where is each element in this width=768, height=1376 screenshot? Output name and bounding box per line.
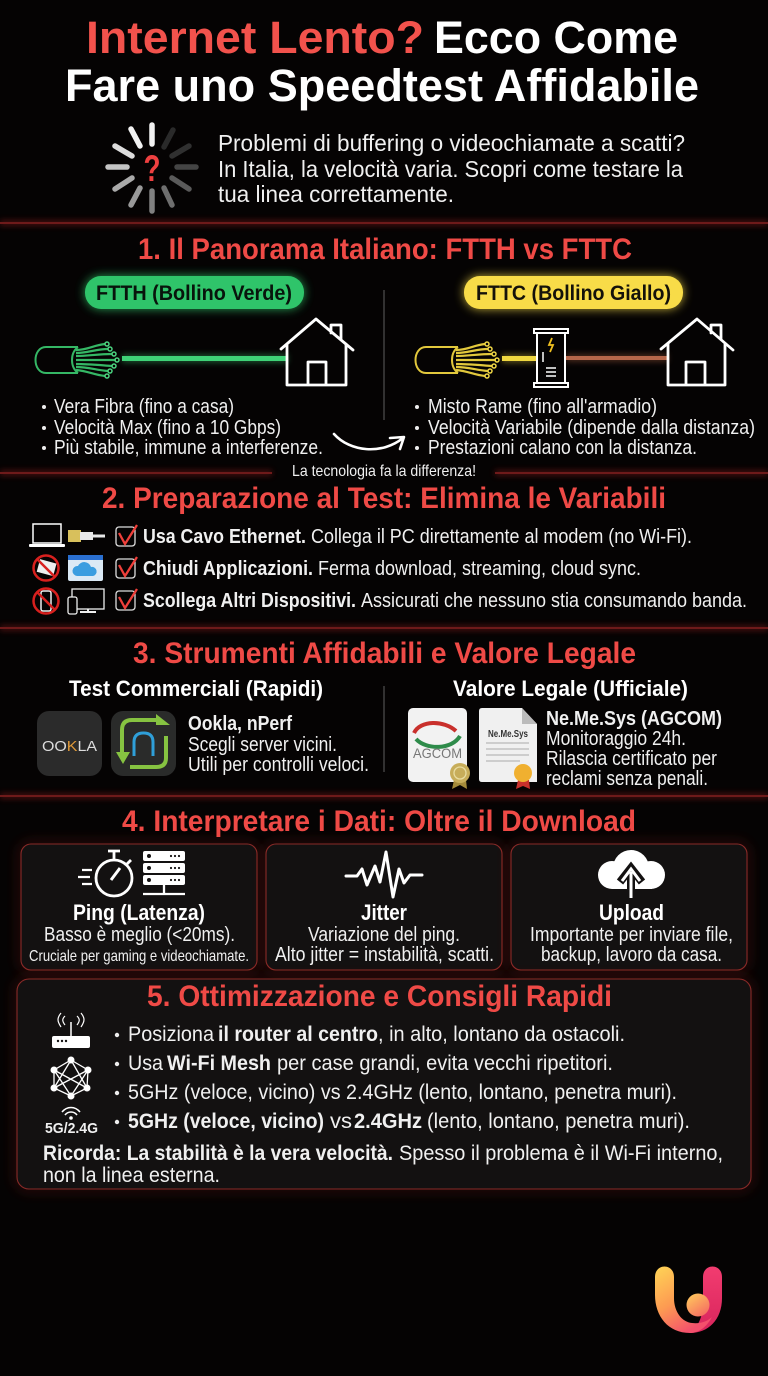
subheading: commercial tests: Test Commerciali (Rapidi) bbox=[69, 676, 323, 701]
tips list: 2.4GHz bbox=[354, 1109, 422, 1133]
tips list: Wi-Fi Mesh bbox=[167, 1051, 271, 1075]
panel: section 2 test preparation bbox=[29, 482, 747, 614]
tips list: 5GHz (veloce, vicino) bbox=[128, 1109, 324, 1133]
icon: buffering spinner with question mark bbox=[108, 125, 196, 211]
icon: laptop and ethernet plug bbox=[29, 524, 105, 547]
icon: wifi bands: 5G/2.4G bbox=[45, 1120, 98, 1137]
title: Fare uno Speedtest Affidabile bbox=[65, 60, 699, 111]
panel: section 1 FTTH vs FTTC bbox=[36, 233, 755, 459]
bullets: FTTC bbox=[415, 396, 755, 459]
badge: FTTH: FTTH (Bollino Verde) bbox=[96, 282, 292, 305]
title bbox=[65, 12, 699, 111]
checklist row: apps bbox=[116, 557, 641, 580]
reminder text: Spesso il problema è il Wi-Fi interno, bbox=[399, 1141, 723, 1165]
tips list: per case grandi, evita vecchi ripetitori. bbox=[277, 1051, 613, 1075]
logo bbox=[655, 1266, 722, 1333]
checklist row: apps: Chiudi Applicazioni. bbox=[143, 557, 313, 580]
text: Ne.Me.Sys: Ne.Me.Sys (AGCOM) bbox=[546, 707, 722, 730]
text: Ookla and nPerf bbox=[188, 712, 369, 776]
card: ping: Basso è meglio (<20ms). bbox=[44, 924, 235, 946]
checklist row: apps: Ferma download, streaming, cloud sync. bbox=[318, 557, 641, 580]
tips list: il router al centro bbox=[218, 1022, 378, 1046]
subheading: legal value: Valore Legale (Ufficiale) bbox=[453, 676, 688, 701]
icon: fibre, street cabinet, copper to house (FTTC) bbox=[416, 319, 733, 387]
card: upload: Upload bbox=[599, 900, 664, 925]
icon: Ookla app bbox=[37, 711, 102, 776]
tips list: Usa bbox=[128, 1051, 163, 1075]
icon: Ookla app: OOKLA bbox=[42, 738, 97, 755]
reminder text: Ricorda: La stabilità è la vera velocità. bbox=[43, 1141, 393, 1165]
tips list bbox=[115, 1022, 690, 1133]
intro text: tua linea correttamente. bbox=[218, 181, 454, 207]
arrow: FTTH to FTTC bbox=[334, 434, 404, 449]
icon: AGCOM certificate card bbox=[408, 708, 470, 789]
icon: cloud upload bbox=[598, 850, 665, 898]
badge: FTTC: FTTC (Bollino Giallo) bbox=[476, 282, 671, 305]
tips list: (lento, lontano, penetra muri). bbox=[427, 1109, 690, 1133]
icon: Ne.Me.Sys certificate document: Ne.Me.Sys bbox=[488, 728, 528, 740]
heading: section 5: 5. Ottimizzazione e Consigli Rapidi bbox=[147, 980, 612, 1013]
bullets: FTTC: Prestazioni calano con la distanza. bbox=[428, 437, 697, 459]
text: Ne.Me.Sys: reclami senza penali. bbox=[546, 768, 708, 790]
bullets: FTTC: Misto Rame (fino all'armadio) bbox=[428, 396, 657, 418]
text: Ookla and nPerf: Utili per controlli veloci. bbox=[188, 754, 369, 776]
checklist row: Ethernet: Collega il PC direttamente al modem (no Wi-Fi). bbox=[311, 525, 692, 548]
checklist row: Ethernet bbox=[116, 525, 692, 548]
badge: FTTH bbox=[85, 276, 304, 309]
tips list: 5GHz (veloce, vicino) vs 2.4GHz (lento, lontano, penetra muri). bbox=[128, 1080, 677, 1104]
text: Ne.Me.Sys: Rilascia certificato per bbox=[546, 748, 717, 770]
icon: no apps and cloud window bbox=[34, 555, 103, 581]
card: ping bbox=[21, 844, 257, 970]
card: upload: backup, lavoro da casa. bbox=[541, 944, 722, 966]
icon: no phone, phone and monitor bbox=[34, 588, 104, 614]
checklist row: Ethernet: Usa Cavo Ethernet. bbox=[143, 525, 306, 548]
text: Ne.Me.Sys bbox=[546, 707, 722, 790]
card: upload bbox=[511, 844, 747, 970]
heading: section 4: 4. Interpretare i Dati: Oltre il Download bbox=[122, 805, 636, 838]
card: ping: Cruciale per gaming e videochiamate. bbox=[29, 948, 249, 965]
title: Internet Lento? bbox=[86, 12, 424, 63]
card: jitter bbox=[266, 844, 502, 970]
bullets: FTTH: Velocità Max (fino a 10 Gbps) bbox=[54, 417, 281, 439]
text: Ookla and nPerf: Scegli server vicini. bbox=[188, 734, 337, 756]
intro text: In Italia, la velocità varia. Scopri come testare la bbox=[218, 156, 684, 182]
icon: Ne.Me.Sys certificate document bbox=[479, 708, 537, 789]
tips list: , in alto, lontano da ostacoli. bbox=[378, 1022, 625, 1046]
icon: jitter waveform bbox=[346, 852, 422, 897]
heading: section 2: 2. Preparazione al Test: Elimina le Variabili bbox=[102, 482, 666, 515]
intro text bbox=[218, 130, 685, 207]
icon: mesh network bbox=[50, 1056, 92, 1100]
title: Ecco Come bbox=[434, 12, 678, 63]
bullets: FTTH: Vera Fibra (fino a casa) bbox=[54, 396, 234, 418]
card: upload: Importante per inviare file, bbox=[530, 924, 733, 946]
card: jitter: Variazione del ping. bbox=[308, 924, 460, 946]
heading: section 1: 1. Il Panorama Italiano: FTTH vs FTTC bbox=[138, 233, 632, 266]
checklist row: devices: Scollega Altri Dispositivi. bbox=[143, 589, 356, 612]
bullets: FTTH bbox=[42, 396, 323, 459]
icon: router bbox=[52, 1013, 90, 1048]
heading: section 3: 3. Strumenti Affidabili e Valore Legale bbox=[133, 637, 636, 670]
tips list: Posiziona bbox=[128, 1022, 214, 1046]
caption: technology makes the difference: La tecnologia fa la differenza! bbox=[292, 463, 476, 480]
bullets: FTTH: Più stabile, immune a interferenze. bbox=[54, 437, 323, 459]
panel: section 5 optimisation bbox=[17, 979, 751, 1189]
icon: nPerf app bbox=[111, 711, 176, 776]
reminder text: non la linea esterna. bbox=[43, 1163, 220, 1187]
icon: fibre cable to house (FTTH) bbox=[36, 319, 353, 385]
text: Ne.Me.Sys: Monitoraggio 24h. bbox=[546, 728, 686, 750]
icon: stopwatch and server bbox=[78, 851, 185, 896]
card: jitter: Jitter bbox=[361, 900, 407, 925]
card: ping: Ping (Latenza) bbox=[73, 900, 205, 925]
reminder text bbox=[43, 1141, 723, 1187]
icon: wifi bands bbox=[45, 1108, 98, 1137]
badge: FTTC bbox=[464, 276, 683, 309]
text: Ookla and nPerf: Ookla, nPerf bbox=[188, 712, 292, 735]
icon: AGCOM certificate card: AGCOM bbox=[413, 745, 462, 761]
card: jitter: Alto jitter = instabilità, scatti. bbox=[275, 944, 494, 966]
panel: section 3 tools bbox=[37, 637, 722, 790]
tips list: vs bbox=[330, 1109, 352, 1133]
icon: buffering spinner with question mark: ? bbox=[144, 148, 160, 189]
intro text: Problemi di buffering o videochiamate a scatti? bbox=[218, 130, 685, 156]
checklist row: devices bbox=[116, 589, 747, 612]
